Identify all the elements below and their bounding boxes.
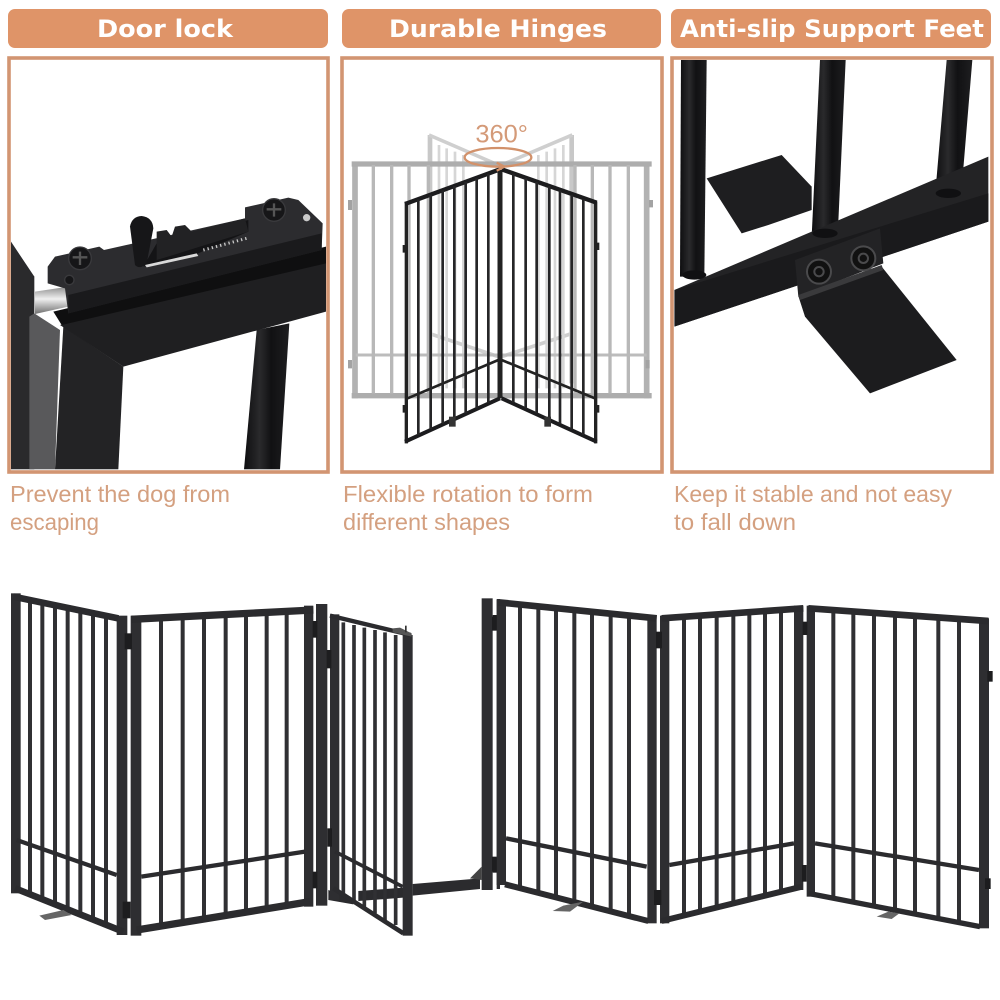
faded gate positions (350, 135, 652, 398)
heading: Door lock (8, 9, 328, 48)
caption: feet: to fall down (674, 509, 796, 535)
heading: Anti-slip Support Feet: Anti-slip Support Feet (680, 15, 984, 43)
heading: Durable Hinges: Durable Hinges (389, 15, 607, 43)
icon: screws (65, 199, 285, 285)
caption: feet: Keep it stable and not easy (674, 481, 952, 507)
front foot plate (798, 267, 957, 393)
gate panel 5 (660, 606, 803, 923)
post beside opening (482, 598, 500, 890)
rear foot (707, 155, 812, 233)
vertical bars (680, 60, 972, 277)
panel: door lock photo (9, 58, 328, 472)
hinges (492, 617, 807, 905)
door panel with lock (328, 614, 413, 936)
heading: Anti-slip Support Feet (671, 9, 991, 48)
icon: foot bolts (807, 246, 875, 284)
caption: door lock: escaping (10, 509, 99, 535)
caption: hinges: Flexible rotation to form (343, 481, 593, 507)
gate panel 6 (807, 606, 993, 928)
product photo: left half of gate (11, 593, 500, 936)
floor connector bar (413, 867, 482, 896)
foreground folded gate (404, 169, 598, 443)
heading: Durable Hinges (342, 9, 661, 48)
rotation ellipse with arrow (465, 148, 531, 171)
product photo: right half of gate (492, 600, 993, 928)
heading: Door lock: Door lock (97, 15, 234, 43)
caption: hinges: different shapes (343, 509, 510, 535)
hinges (123, 615, 497, 918)
panel: support feet photo (672, 58, 992, 472)
360 degree label: 360° (475, 121, 528, 149)
gate panel 4 (497, 600, 657, 923)
base rail (674, 157, 988, 327)
panel: hinges rotation diagram (342, 58, 662, 472)
gate panel 1 (11, 593, 127, 935)
caption: door lock: Prevent the dog from (10, 481, 230, 507)
gate panel 2 (131, 606, 313, 936)
icon: lock knob (130, 216, 153, 267)
connector post (316, 604, 327, 906)
